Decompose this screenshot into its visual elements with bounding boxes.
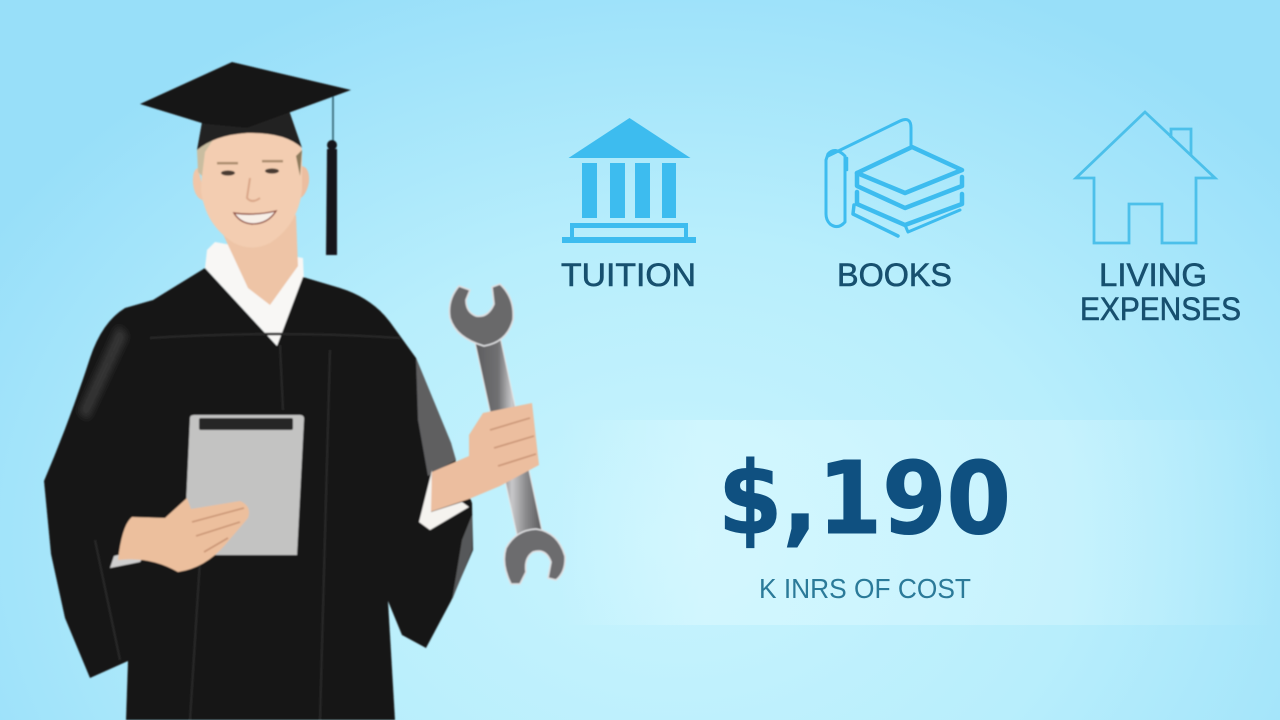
label: books: BOOKS [837,257,952,293]
icon: house [1076,112,1215,243]
tassel [326,96,337,255]
caption: kinds of cost: K INRS OF COST [759,573,971,604]
panel: total cost band [560,420,1280,625]
wrench [449,284,565,584]
label: living expenses: EXPENSES [1080,291,1241,327]
face [193,128,309,248]
icon: books [826,120,962,236]
mouth [234,211,276,224]
mortarboard cap [140,62,351,150]
label: living expenses: LIVING [1099,257,1207,293]
left hand and arm [110,498,249,572]
label: tuition: TUITION [561,257,696,293]
total amount: $,190 [718,440,1011,557]
label: living expenses [1080,257,1241,327]
figure: graduate with tablet and wrench [44,62,565,720]
eyes [217,160,283,176]
tablet [186,415,304,555]
shirt collar [205,242,304,346]
icon: tuition building [562,118,696,243]
gown [44,268,473,720]
right hand and cuff [419,403,539,530]
neck [222,215,298,305]
